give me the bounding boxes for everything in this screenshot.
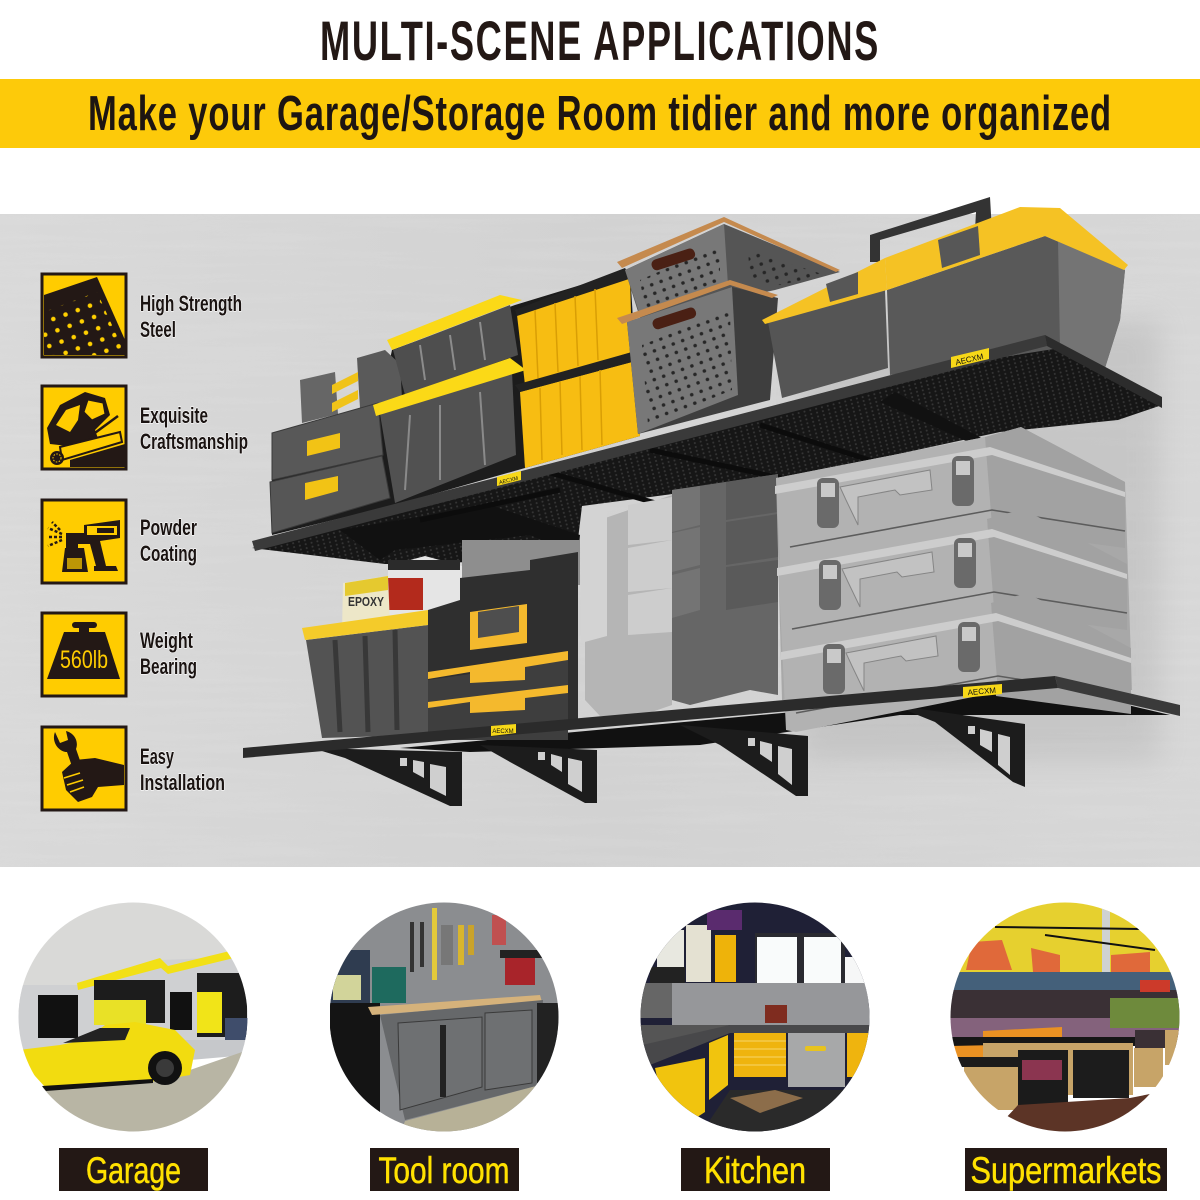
bracket 3	[680, 725, 808, 796]
scene: supermarket	[950, 902, 1180, 1135]
small tool boxes	[300, 350, 402, 423]
bracket 1	[312, 748, 462, 806]
text: high strength steel: High Strength	[140, 291, 242, 316]
tote upper	[387, 295, 522, 395]
label: supermarkets: Supermarkets	[970, 1150, 1162, 1191]
basket lower	[617, 280, 778, 434]
label: garage: Garage	[86, 1150, 181, 1191]
toolbox handle	[870, 197, 992, 262]
text: easy installation: Installation	[140, 770, 225, 795]
grey case middle	[777, 509, 1127, 648]
label: kitchen: Kitchen	[704, 1150, 806, 1191]
bracket cut-outs	[400, 726, 1010, 796]
dark gap behind stored boxes	[272, 270, 640, 535]
drawer box bottom	[270, 456, 390, 533]
upper shelf front edge	[252, 335, 1162, 551]
text: powder coating	[140, 515, 197, 566]
paint cans	[342, 556, 462, 632]
bracket 2	[480, 745, 597, 803]
text: weight bearing: Bearing	[140, 654, 197, 679]
text: easy installation	[140, 744, 225, 795]
paint cans: EPOXY	[348, 594, 384, 609]
icon: spray gun	[42, 500, 126, 583]
grey case bottom	[781, 593, 1131, 732]
text: high strength steel: Steel	[140, 317, 176, 342]
drawer box top	[272, 403, 383, 480]
grey case top	[775, 427, 1125, 566]
lower shelf front edge	[243, 676, 1180, 758]
icon: weight: 560lb	[60, 646, 108, 674]
yellow bin lower	[515, 352, 640, 468]
text: exquisite craftsmanship	[140, 403, 248, 454]
brand tag lower right: AECXM	[967, 686, 997, 697]
label: tool room: Tool room	[378, 1150, 510, 1191]
icon: weight	[42, 613, 126, 696]
brand tag lower right	[963, 684, 1002, 698]
scene: tool room	[330, 902, 560, 1135]
brand tag upper left: AECXM	[499, 476, 519, 486]
yellow subtitle banner	[0, 79, 1200, 148]
rolling tool tower	[428, 552, 578, 740]
yellow bin upper	[515, 268, 632, 385]
text: high strength steel	[140, 291, 242, 342]
feature list	[42, 274, 248, 810]
upper shelf underside	[252, 345, 1162, 564]
black tote lower shelf	[302, 610, 428, 738]
basket top	[617, 217, 840, 318]
bracket 4	[893, 705, 1025, 787]
text: powder coating: Coating	[140, 541, 197, 566]
tote lower	[373, 358, 526, 503]
brand tag lower left: AECXM	[492, 729, 514, 735]
brand tag lower left	[491, 724, 516, 736]
brand tag upper right: AECXM	[955, 352, 985, 367]
large toolbox right	[885, 207, 1128, 375]
wall gap above tower	[462, 540, 580, 585]
title: MULTI-SCENE APPLICATIONS	[320, 9, 880, 72]
text: exquisite craftsmanship: Craftsmanship	[140, 429, 248, 454]
grey case stack backing	[776, 427, 1132, 700]
text: weight bearing	[140, 628, 197, 679]
text: powder coating: Powder	[140, 515, 197, 540]
icon: welder	[42, 386, 126, 469]
background wall	[0, 214, 1200, 867]
dark grey bin	[672, 474, 778, 705]
icon: wrench in hand	[42, 727, 126, 810]
text: easy installation: Easy	[140, 744, 174, 769]
scene: garage	[18, 902, 250, 1135]
brand tag upper right	[951, 348, 989, 368]
shelving scene	[243, 197, 1180, 806]
lower shelf underside	[400, 688, 1170, 752]
icon: steel plate	[42, 274, 126, 357]
scene: kitchen	[640, 902, 870, 1135]
text: exquisite craftsmanship: Exquisite	[140, 403, 208, 428]
text: weight bearing: Weight	[140, 628, 193, 653]
brand tag upper left	[497, 471, 521, 486]
small toolbox right	[762, 258, 888, 398]
light grey bin	[581, 495, 672, 716]
